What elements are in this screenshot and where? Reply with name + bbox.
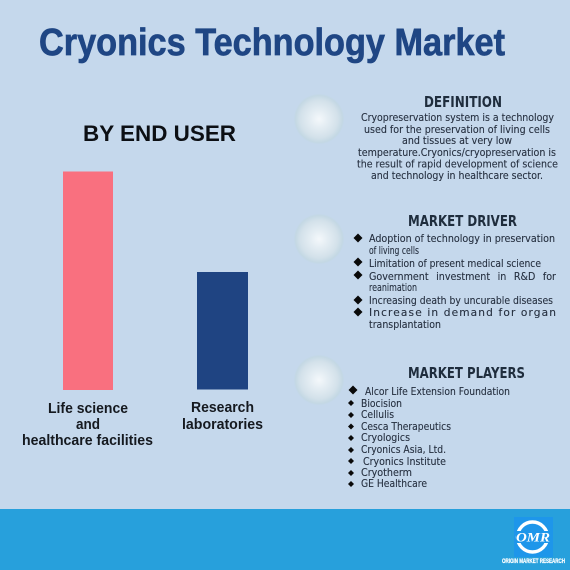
- market players list: [348, 386, 510, 490]
- label: research laboratories: [182, 400, 263, 433]
- market players list: Cryologics: [361, 432, 410, 444]
- panel: market players: [294, 355, 525, 490]
- market players list: Cryonics Institute: [363, 456, 446, 468]
- market driver list: Adoption of technology in preservation: [369, 233, 555, 245]
- definition text: and tissues at very low: [402, 135, 512, 147]
- definition text: and technology in healthcare sector.: [371, 170, 543, 182]
- footer band: [0, 509, 570, 570]
- market players list: Cryotherm: [361, 467, 412, 479]
- label: life science and healthcare facilities: healthcare facilities: [22, 433, 153, 449]
- definition text: [357, 112, 558, 182]
- market driver list: Limitation of present medical science: [369, 258, 541, 270]
- title: Cryonics Technology Market: [39, 22, 505, 64]
- market players heading: MARKET PLAYERS: [408, 364, 525, 382]
- icon: market players orb: [294, 355, 344, 405]
- market driver list: reanimation: [369, 282, 417, 294]
- market driver heading: MARKET DRIVER: [408, 212, 517, 230]
- icon: market driver orb: [294, 214, 344, 264]
- logo ring: [518, 522, 548, 552]
- market driver list: Increase in demand for organ: [369, 307, 556, 319]
- market players list: GE Healthcare: [361, 478, 427, 490]
- market driver list: transplantation: [369, 319, 441, 331]
- label: life science and healthcare facilities: [22, 401, 153, 449]
- market players list: Cesca Therapeutics: [361, 421, 451, 433]
- label: research laboratories: laboratories: [182, 417, 263, 433]
- market driver list: [354, 233, 557, 331]
- logo tile: [514, 517, 553, 557]
- market players list: Cellulis: [361, 409, 394, 421]
- logo letter backing: [516, 531, 550, 543]
- market players list: Biocision: [361, 398, 402, 410]
- chart heading: BY END USER: [83, 121, 236, 146]
- label: research laboratories: Research: [191, 400, 254, 416]
- definition text: used for the preservation of living cells: [364, 124, 550, 136]
- panel: market driver: [294, 212, 557, 331]
- icon: definition orb: [294, 94, 344, 144]
- market players list: Cryonics Asia, Ltd.: [361, 444, 446, 456]
- market players list: Alcor Life Extension Foundation: [365, 386, 510, 398]
- market driver list: of living cells: [369, 245, 419, 257]
- bar: research laboratories: [197, 272, 248, 390]
- bar: life science and healthcare facilities: [63, 172, 113, 390]
- logo letters: OMR: [516, 530, 550, 544]
- label: life science and healthcare facilities: Life science: [48, 401, 128, 417]
- label: life science and healthcare facilities: and: [76, 417, 100, 433]
- logo: origin market research: [502, 517, 565, 565]
- panel: by end user bar chart: [22, 121, 263, 449]
- panel: definition: [294, 93, 558, 182]
- definition heading: DEFINITION: [424, 93, 502, 111]
